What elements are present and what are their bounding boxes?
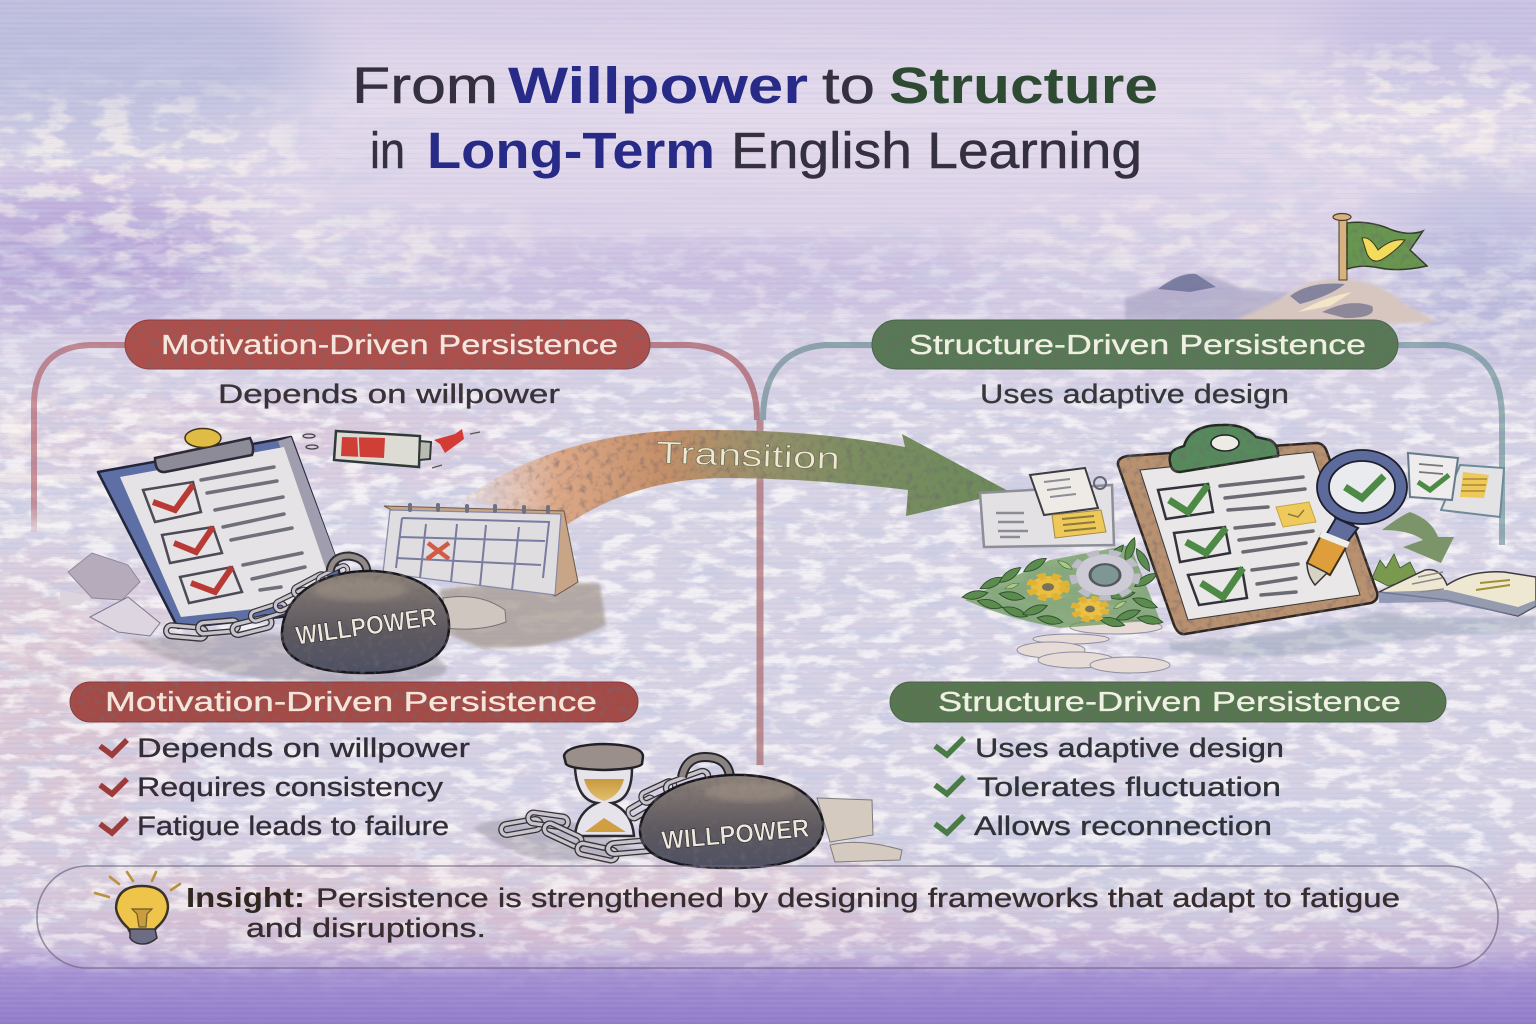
panel: motivation-driven list bbox=[70, 682, 638, 841]
title: From bbox=[352, 57, 498, 114]
list: motivation items bbox=[100, 733, 470, 841]
illustration: right clipboard, documents, gears, book bbox=[962, 425, 1536, 673]
heading: motivation-driven: Motivation-Driven Persistence bbox=[105, 686, 597, 717]
arrow: to book bbox=[1382, 512, 1454, 563]
icon: gears bbox=[1031, 554, 1134, 619]
arrow: transition: Transition bbox=[656, 435, 841, 476]
list: motivation items: Depends on willpower bbox=[137, 733, 470, 763]
title: English Learning bbox=[731, 122, 1142, 179]
icon: willpower ball bbox=[640, 775, 823, 868]
title bbox=[352, 57, 1158, 179]
icon: chain bbox=[166, 556, 367, 639]
list: motivation items: Requires consistency bbox=[137, 772, 444, 802]
icon: summit with flag bbox=[1125, 214, 1438, 326]
icon: willpower ball: WILLPOWER bbox=[294, 601, 439, 651]
list: structure items bbox=[935, 733, 1284, 841]
icon: willpower ball: WILLPOWER bbox=[660, 813, 811, 855]
icon: light bulb bbox=[95, 872, 180, 944]
list: motivation items: Fatigue leads to failure bbox=[137, 811, 449, 841]
icon: open book bbox=[1379, 570, 1536, 616]
icon: willpower ball bbox=[282, 571, 449, 673]
panel: structure-driven list bbox=[890, 682, 1446, 841]
list: structure items: Allows reconnection bbox=[974, 811, 1272, 841]
icon: clipboard bbox=[98, 428, 345, 628]
connector lines bbox=[34, 345, 1502, 765]
text: uses adaptive design: Uses adaptive design bbox=[980, 379, 1289, 409]
panel: insight bbox=[37, 866, 1498, 968]
arrow: transition bbox=[462, 430, 1010, 528]
icon: clipboard with checks bbox=[1118, 425, 1377, 634]
heading: structure-driven: Structure-Driven Persistence bbox=[938, 686, 1401, 717]
icon: documents right bbox=[1408, 453, 1504, 517]
illustration: left clipboard, battery, calendar, ball bbox=[60, 428, 606, 682]
icon: foliage bbox=[962, 536, 1418, 629]
panel: insight: Persistence is strengthened by designing frameworks that adapt to fatigue bbox=[316, 883, 1400, 913]
text: depends on willpower: Depends on willpower bbox=[218, 379, 560, 409]
title: to bbox=[822, 57, 875, 114]
stepping stones and ground bbox=[1017, 612, 1536, 673]
icon: hourglass bbox=[564, 744, 643, 836]
panel: insight: and disruptions. bbox=[246, 913, 486, 943]
illustration: hourglass and willpower ball bbox=[473, 744, 902, 868]
icon: low battery bbox=[303, 429, 480, 468]
ground and rocks bbox=[60, 553, 606, 682]
title: Long-Term bbox=[427, 122, 715, 179]
icon: chain bbox=[500, 757, 730, 862]
panel: motivation-driven header bbox=[125, 320, 650, 369]
panel: insight: Insight: bbox=[186, 882, 305, 913]
heading: motivation-driven bbox=[70, 682, 638, 722]
title: in bbox=[370, 122, 405, 179]
panel: motivation-driven header: Motivation-Driven Persistence bbox=[161, 329, 618, 360]
list: structure items: Tolerates fluctuation bbox=[977, 772, 1281, 802]
icon: flag bbox=[1333, 214, 1427, 280]
title: Willpower bbox=[508, 57, 808, 114]
icon: magnifier and pencil bbox=[1307, 450, 1407, 585]
list: structure items: Uses adaptive design bbox=[975, 733, 1284, 763]
icon: documents left bbox=[980, 468, 1114, 547]
panel: structure-driven header bbox=[872, 320, 1398, 369]
title: Structure bbox=[889, 57, 1158, 114]
panel: structure-driven header: Structure-Driven Persistence bbox=[909, 329, 1366, 360]
icon: calendar bbox=[383, 505, 578, 596]
heading: structure-driven bbox=[890, 682, 1446, 722]
